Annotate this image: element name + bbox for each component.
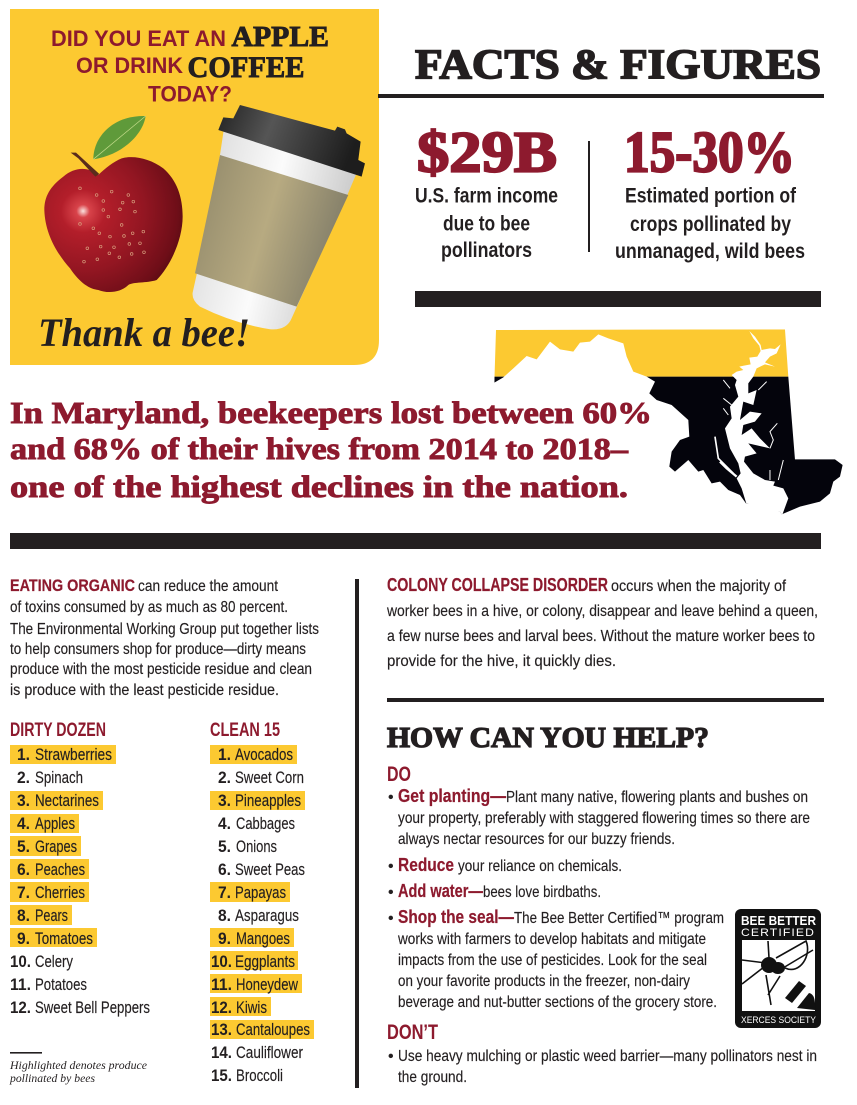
section: do (387, 763, 810, 1011)
section: don't: • (388, 1048, 394, 1065)
text block: colony collapse disorder: provide for the hive, it quickly dies. (387, 653, 616, 670)
list: clean 15: 3. (218, 792, 231, 810)
list: clean 15: 2. (218, 769, 231, 787)
list: clean 15: Eggplants (235, 953, 295, 971)
icon: bee better certified seal: XERCES SOCIETY (741, 1015, 817, 1026)
list: clean 15: Onions (236, 838, 277, 856)
stat: farm income: due to bee (443, 212, 530, 236)
footnote: Highlighted denotes produce (9, 1060, 147, 1072)
tip: get planting: always nectar resources for our buzzy friends. (398, 831, 675, 848)
question heading (51, 22, 329, 106)
tip: shop the seal: Shop the seal— (398, 907, 514, 927)
icon: coffee cup (193, 105, 365, 329)
list: clean 15: Cabbages (236, 815, 295, 833)
list: dirty dozen: 12. (10, 999, 31, 1017)
list: clean 15: 7. (218, 884, 231, 902)
list: dirty dozen: Spinach (35, 769, 83, 787)
tip: shop the seal: impacts from the use of pesticides. Look for the seal (398, 952, 707, 969)
map: Maryland (494, 329, 843, 514)
tip: shop the seal: • (388, 910, 394, 927)
tip: shop the seal: The Bee Better Certified™ program (514, 910, 724, 927)
stat: wild bees (615, 120, 805, 263)
list: dirty dozen: 10. (10, 953, 31, 971)
list: dirty dozen: 6. (17, 861, 30, 879)
tip: shop the seal (388, 907, 724, 1011)
headline: Maryland hive losses (10, 395, 652, 504)
icon: bee better certified seal: BEE BETTER (741, 913, 817, 928)
list: dirty dozen: Potatoes (35, 976, 87, 994)
stat: farm income: pollinators (441, 239, 532, 262)
list: clean 15: 12. (211, 999, 232, 1017)
list: dirty dozen: Cherries (35, 884, 85, 902)
question heading: COFFEE (188, 51, 304, 84)
text block: colony collapse disorder (386, 575, 818, 670)
list: dirty dozen: DIRTY DOZEN (10, 720, 106, 741)
text block: eating organic: can reduce the amount (138, 578, 278, 595)
headline: Maryland hive losses: and 68% of their hives from 2014 to 2018– (10, 431, 629, 466)
text block: eating organic: is produce with the least pesticide residue. (10, 682, 279, 699)
list: clean 15: Broccoli (236, 1067, 283, 1085)
text block: colony collapse disorder: COLONY COLLAPSE DISORDER (387, 575, 608, 595)
list: clean 15: 11. (211, 976, 232, 994)
heading: how can you help: HOW CAN YOU HELP? (387, 722, 709, 754)
stat: wild bees: Estimated portion of (625, 184, 797, 208)
tip: get planting: Plant many native, flowering plants and bushes on (506, 789, 808, 806)
headline: Maryland hive losses: In Maryland, beekeepers lost between 60% (10, 395, 652, 430)
text block: eating organic: to help consumers shop for produce—dirty means (10, 641, 306, 658)
list: dirty dozen: 4. (17, 815, 30, 833)
list: dirty dozen: Tomatoes (35, 930, 93, 948)
list: clean 15: 6. (218, 861, 231, 879)
list: dirty dozen (10, 720, 150, 1017)
question heading: TODAY? (148, 82, 232, 106)
list: clean 15: 13. (211, 1021, 232, 1039)
list: dirty dozen: Sweet Bell Peppers (35, 999, 150, 1017)
list: clean 15: 8. (218, 907, 231, 925)
text block: eating organic: EATING ORGANIC (10, 576, 135, 595)
list: clean 15: 1. (218, 746, 231, 764)
text block: eating organic: The Environmental Working Group put together lists (10, 621, 319, 638)
list: clean 15: 9. (218, 930, 231, 948)
text block: eating organic: of toxins consumed by as much as 80 percent. (10, 599, 288, 616)
tip: add water: bees love birdbaths. (483, 884, 601, 901)
list: dirty dozen: Strawberries (35, 746, 112, 764)
list: clean 15: Cauliflower (236, 1044, 303, 1062)
list: clean 15: Pineapples (235, 792, 301, 810)
list: dirty dozen: 9. (17, 930, 30, 948)
footnote: pollinated by bees (9, 1073, 96, 1085)
tip: add water: • (388, 884, 394, 901)
tip: get planting (388, 786, 810, 848)
heading: facts and figures: FACTS & FIGURES (415, 42, 821, 88)
tip: add water: Add water— (398, 881, 483, 901)
section: do: DO (387, 763, 411, 786)
tip: get planting: Get planting— (398, 786, 506, 806)
list: clean 15: 5. (218, 838, 231, 856)
footnote (9, 1052, 147, 1085)
tip: add water (388, 881, 601, 901)
list: clean 15: 4. (218, 815, 231, 833)
list: clean 15: Papayas (235, 884, 286, 902)
question heading: DID YOU EAT AN (51, 26, 226, 51)
list: clean 15: Avocados (235, 746, 293, 764)
stat: wild bees: crops pollinated by (630, 213, 791, 236)
list: clean 15: Cantaloupes (236, 1021, 310, 1039)
icon: bee better certified seal: CERTIFIED (741, 927, 815, 939)
list: clean 15 (210, 720, 314, 1085)
text block: colony collapse disorder: occurs when the majority of (611, 578, 786, 595)
list: dirty dozen: Apples (35, 815, 75, 833)
list: dirty dozen: Peaches (35, 861, 85, 879)
stat: wild bees: 15-30% (624, 120, 795, 184)
list: clean 15: 14. (211, 1044, 232, 1062)
headline: Maryland hive losses: one of the highest declines in the nation. (10, 469, 628, 504)
tip: shop the seal: beverage and nut-butter sections of the grocery store. (398, 994, 717, 1011)
list: dirty dozen: 11. (10, 976, 31, 994)
tip: shop the seal: on your favorite products in the freezer, non-dairy (398, 973, 690, 990)
list: clean 15: Mangoes (236, 930, 290, 948)
list: dirty dozen: 1. (17, 746, 30, 764)
list: dirty dozen: Pears (35, 907, 68, 925)
stat: farm income: $29B (417, 120, 557, 184)
list: dirty dozen: 5. (17, 838, 30, 856)
list: dirty dozen: 7. (17, 884, 30, 902)
stat: farm income: U.S. farm income (415, 184, 558, 208)
section: don't: DON’T (387, 1021, 438, 1044)
text block: eating organic (10, 576, 319, 699)
list: dirty dozen: Grapes (35, 838, 77, 856)
list: clean 15: CLEAN 15 (210, 720, 280, 741)
tip: get planting: • (388, 789, 394, 806)
list: dirty dozen: 2. (17, 769, 30, 787)
tip: reduce: your reliance on chemicals. (458, 858, 622, 875)
icon: red apple (44, 116, 183, 292)
tip: reduce: Reduce (398, 855, 454, 875)
list: clean 15: 10. (211, 953, 232, 971)
list: clean 15: Kiwis (236, 999, 267, 1017)
question heading: APPLE (232, 22, 329, 53)
stat: wild bees: unmanaged, wild bees (615, 240, 805, 263)
stat: farm income (415, 120, 558, 262)
tip: reduce: • (388, 858, 394, 875)
text block: eating organic: produce with the most pesticide residue and clean (10, 661, 312, 678)
tip: reduce (388, 855, 622, 875)
question heading: OR DRINK (76, 53, 184, 78)
section: don't: the ground. (398, 1069, 467, 1086)
list: clean 15: Sweet Peas (235, 861, 305, 879)
list: clean 15: 15. (211, 1067, 232, 1085)
list: clean 15: Asparagus (235, 907, 299, 925)
thank a bee script: Thank a bee! (38, 310, 250, 355)
tip: shop the seal: works with farmers to develop habitats and mitigate (397, 931, 706, 948)
list: dirty dozen: 8. (17, 907, 30, 925)
list: clean 15: Honeydew (236, 976, 298, 994)
list: dirty dozen: 3. (17, 792, 30, 810)
list: clean 15: Sweet Corn (235, 769, 304, 787)
section: don't (387, 1021, 817, 1086)
icon: bee better certified seal (735, 909, 821, 1028)
panel: yellow apple and coffee card (10, 9, 379, 365)
list: dirty dozen: Nectarines (35, 792, 99, 810)
list: dirty dozen: Celery (35, 953, 74, 971)
